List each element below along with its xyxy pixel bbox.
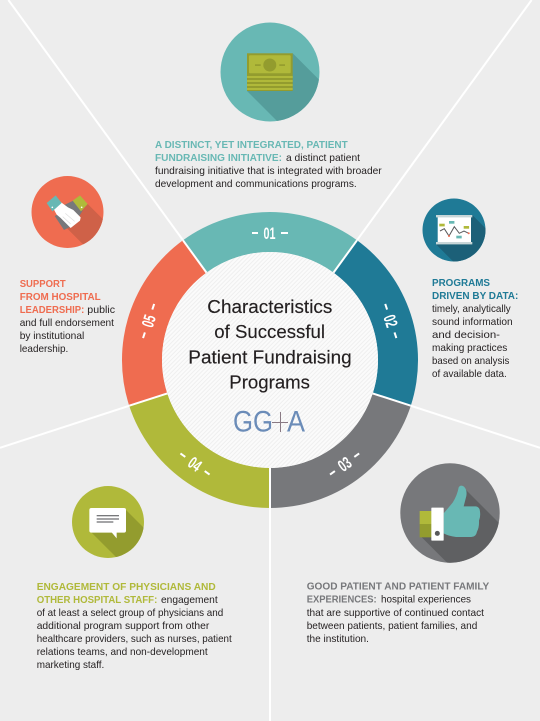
text block: hospital leadership: SUPPORT	[20, 278, 66, 290]
segment 03	[270, 393, 411, 508]
segment 01	[183, 212, 357, 273]
text block: physicians and staff: additional program support from other	[37, 620, 210, 632]
icon: money stack	[220, 22, 320, 122]
text block: physicians and staff: healthcare providers, such as nurses, patient	[37, 633, 232, 645]
text block: hospital leadership: by institutional	[20, 330, 84, 342]
text block: driven by data: timely, analytically	[432, 303, 511, 315]
text block: hospital leadership	[20, 278, 115, 355]
text block: driven by data: sound information	[432, 316, 513, 328]
text block: distinct initiative: a distinct patient	[286, 152, 360, 164]
centre title	[188, 296, 352, 392]
text block: physicians and staff: OTHER HOSPITAL STAFF:	[37, 594, 157, 606]
text block: distinct initiative: A DISTINCT, YET INTEGRATED, PATIENT	[155, 139, 348, 151]
text block: patient experiences: the institution.	[307, 633, 369, 645]
text block: physicians and staff	[37, 581, 232, 671]
text block: driven by data: PROGRAMS	[432, 277, 490, 289]
text block: patient experiences: that are supportive of continued contact	[307, 607, 484, 619]
text block: physicians and staff: engagement	[161, 594, 218, 606]
text block: hospital leadership: public	[87, 304, 115, 316]
centre title: Patient Fundraising	[188, 346, 352, 367]
ring chart	[122, 212, 418, 508]
segment 04: 04	[184, 453, 205, 476]
centre title: Programs	[229, 371, 310, 392]
segment 02: 02	[379, 313, 401, 330]
text block: distinct initiative: development and communications programs.	[155, 178, 357, 190]
segment 05	[122, 240, 206, 406]
text block: patient experiences: between patients, patient families, and	[307, 620, 477, 632]
text block: patient experiences: EXPERIENCES:	[307, 594, 377, 606]
text block: driven by data	[432, 277, 518, 380]
text block: hospital leadership: leadership.	[20, 343, 68, 355]
text block: physicians and staff: marketing staff.	[37, 659, 104, 671]
text block: driven by data: of available data.	[432, 368, 507, 380]
text block: distinct initiative: FUNDRAISING INITIATIVE:	[155, 152, 282, 164]
text block: distinct initiative: fundraising initiative that is integrated with broader	[155, 165, 382, 177]
segment 05: 05	[138, 313, 160, 330]
text block: driven by data: based on analysis	[432, 355, 509, 367]
text block: hospital leadership: FROM HOSPITAL	[20, 291, 101, 303]
icon: handshake	[32, 176, 104, 248]
segment 04	[129, 393, 270, 508]
segment 02	[334, 240, 418, 406]
icon: presentation chart	[422, 198, 486, 262]
logo: GG+A: A	[287, 406, 305, 439]
text block: driven by data: and decision-	[432, 329, 501, 341]
text block: patient experiences	[307, 580, 489, 645]
logo: GG+A: GG	[233, 406, 273, 439]
centre circle	[162, 252, 378, 468]
text block: patient experiences: GOOD PATIENT AND PATIENT FAMILY	[307, 580, 489, 592]
text block: physicians and staff: relations teams, and non-development	[37, 646, 208, 658]
segment 01: 01	[264, 224, 276, 243]
centre title: of Successful	[214, 321, 325, 342]
logo: GG+A	[233, 406, 305, 439]
text block: driven by data: making practices	[432, 342, 507, 354]
text block: patient experiences: hospital experiences	[381, 594, 471, 606]
text block: driven by data: DRIVEN BY DATA:	[432, 290, 518, 302]
text block: distinct initiative	[155, 139, 382, 190]
text block: physicians and staff: of at least a select group of physicians and	[37, 607, 223, 619]
centre title: Characteristics	[207, 296, 332, 317]
icon: speech bubble	[72, 486, 144, 558]
text block: physicians and staff: ENGAGEMENT OF PHYSICIANS AND	[37, 581, 216, 593]
segment 03: 03	[334, 453, 355, 476]
icon: thumbs up	[400, 463, 500, 563]
text block: hospital leadership: LEADERSHIP:	[20, 304, 84, 316]
text block: hospital leadership: and full endorsement	[20, 317, 114, 329]
